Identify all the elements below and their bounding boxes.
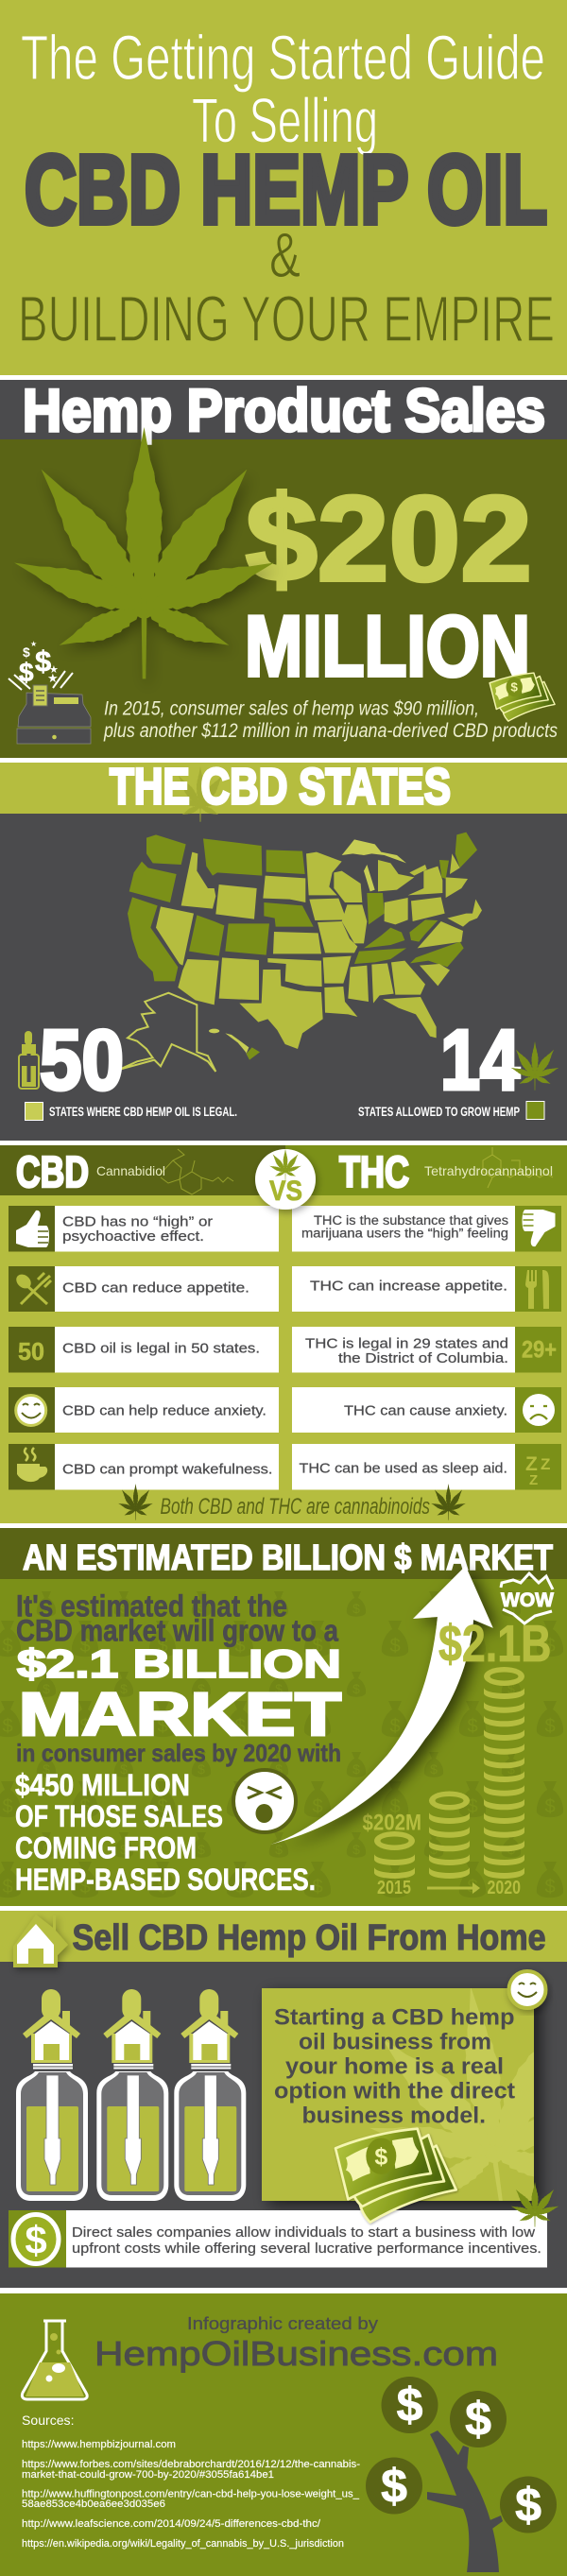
text: market estimate: in consumer sales by 2020 with	[16, 1739, 341, 1767]
text: CBD facts: psychoactive effect.	[62, 1228, 204, 1245]
icon: fork and knife	[525, 1270, 549, 1309]
icon: money stack: $	[510, 680, 519, 694]
icon: sad face	[523, 1394, 555, 1426]
icon: money tree: $	[465, 2393, 491, 2446]
badge: wow	[501, 1573, 554, 1623]
panel: title	[0, 0, 567, 375]
text: sources: http://www.leafscience.com/2014/09/24/5-differences-cbd-thc/	[22, 2518, 321, 2530]
icon: sleep z	[525, 1453, 550, 1488]
icon: oil dropper	[19, 1031, 39, 1089]
icon: money tree: $	[381, 2460, 407, 2513]
text: sources: https://en.wikipedia.org/wiki/Legality_of_cannabis_by_U.S._jurisdiction	[22, 2538, 344, 2550]
icon: cash register: $	[23, 644, 30, 660]
chart: 2015 stack	[374, 1831, 415, 1879]
label: 2020: 2020	[488, 1878, 521, 1898]
text: THC facts: THC is the substance that gives	[314, 1213, 508, 1228]
heading: THC: THC	[339, 1147, 409, 1196]
panel: hemp product sales	[0, 378, 567, 758]
text: sources: https://www.hempbizjournal.com	[22, 2439, 176, 2450]
text: VS: VS	[269, 1176, 302, 1207]
icon: footer leaf left	[117, 1484, 154, 1520]
icon: cash register: $	[35, 644, 51, 678]
legend: legal states: STATES WHERE CBD HEMP OIL IS LEGAL.	[49, 1104, 237, 1119]
text: THC facts: the District of Columbia.	[338, 1350, 508, 1366]
icon: large money stack	[335, 2129, 456, 2223]
icon: shocked face	[233, 1770, 296, 1832]
icon: dropper bottle 2	[96, 1989, 168, 2201]
text: callout copy: option with the direct	[274, 2079, 515, 2104]
icon: money stack	[490, 673, 555, 721]
logo: HempOilBusiness.com: HempOilBusiness.com	[94, 2334, 498, 2373]
icon: sleep z: Z	[529, 1472, 538, 1488]
callout: starting a business	[262, 1969, 552, 2210]
text: CBD facts: CBD can reduce appetite.	[62, 1279, 249, 1297]
icon: smile badge	[508, 1971, 546, 2008]
text: CBD facts: CBD oil is legal in 50 states.	[62, 1340, 260, 1357]
icon: cash register: ★	[49, 664, 59, 676]
number: $202: $202	[246, 472, 532, 607]
icon: dollar coin: $	[25, 2218, 47, 2262]
icon: money tree	[366, 2377, 557, 2572]
text: CBD facts: CBD has no “high” or	[62, 1213, 213, 1230]
text: THC facts: THC can be used as sleep aid.	[299, 1461, 507, 1476]
icon: number 29+: 29+	[522, 1336, 557, 1363]
icon: large money stack: $	[374, 2144, 387, 2171]
text: THC facts: marijuana users the “high” feeling	[301, 1227, 508, 1240]
panel: CBD vs THC	[0, 1145, 567, 1523]
text: sources: https://www.forbes.com/sites/debraborchardt/2016/12/12/the-cannabis-	[22, 2459, 360, 2470]
icon: leaf beside 14	[510, 1041, 559, 1091]
icon: spoon and fork	[14, 1272, 51, 1304]
text: callout copy: business model.	[302, 2104, 486, 2128]
icon: flask	[22, 2321, 87, 2399]
icon: number 50: 50	[18, 1337, 44, 1365]
text: sales detail: In 2015, consumer sales of hemp was $90 million,	[104, 697, 479, 720]
text: sources: http://www.huffingtonpost.com/entry/can-cbd-help-you-lose-weight_us_	[22, 2489, 360, 2500]
chart: CBD molecule	[159, 1149, 233, 1194]
icon: cash register: ★	[30, 640, 37, 648]
badge: versus	[255, 1149, 316, 1210]
text: both cannabinoids: Both CBD and THC are cannabinoids	[161, 1494, 430, 1520]
icon: dropper bottle 1	[16, 1989, 88, 2201]
icon: large hemp leaf	[9, 427, 279, 678]
panel: the CBD states	[0, 758, 567, 1141]
text: market estimate: $2.1 BILLION	[17, 1641, 341, 1686]
text: market estimate: COMING FROM	[15, 1831, 197, 1865]
text: market estimate: OF THOSE SALES	[15, 1799, 223, 1833]
number: 14: 14	[440, 1013, 520, 1108]
text: CBD facts: CBD can prompt wakefulness.	[62, 1461, 272, 1478]
icon: leaf in badge	[268, 1149, 302, 1180]
icon: footer leaf right	[430, 1484, 467, 1520]
heading: the CBD states: THE CBD STATES	[110, 758, 451, 815]
icon: smile	[16, 1395, 46, 1425]
text: sources	[22, 2413, 360, 2550]
number: 50: 50	[40, 1013, 124, 1108]
icon: dropper bottle 3	[174, 1989, 246, 2201]
chart: 2020 stack	[484, 1667, 524, 1879]
map: US states	[120, 833, 482, 1072]
text: market estimate: CBD market will grow to a	[16, 1614, 339, 1648]
text: market estimate: $450 MILLION	[15, 1768, 190, 1802]
text: tetrahydrocannabinol: Tetrahydrocannabinol	[424, 1163, 553, 1178]
heading: ampersand: &	[269, 220, 301, 291]
icon: coffee cup	[17, 1448, 47, 1482]
text: market estimate: MARKET	[19, 1680, 341, 1748]
text: market estimate	[15, 1589, 341, 1897]
text: THC facts: THC can cause anxiety.	[344, 1402, 507, 1419]
heading: guide line 2: To Selling	[192, 85, 378, 157]
panel: sell from home	[0, 1911, 567, 2288]
text: sources: 58ae853ce4b0ea6ee3d035e6	[22, 2499, 165, 2510]
chart: middle stack	[429, 1792, 470, 1879]
chart: THC molecule	[483, 1147, 553, 1188]
text: created by: Infographic created by	[187, 2314, 378, 2333]
badge: wow: WOW	[501, 1589, 554, 1611]
text: market estimate: HEMP-BASED SOURCES.	[15, 1863, 316, 1897]
rows: right boxes	[292, 1206, 561, 1489]
icon: small leaf behind heading	[172, 766, 229, 822]
text: CBD facts: CBD can help reduce anxiety.	[62, 1402, 266, 1419]
text: sales detail	[103, 697, 558, 742]
icon: sleep z: Z	[541, 1455, 550, 1473]
text: direct sales copy: Direct sales companies allow individuals to start a business with low	[72, 2225, 536, 2241]
text: CBD facts	[62, 1213, 272, 1478]
text: direct sales copy: upfront costs while offering several lucrative performance incentives.	[72, 2241, 541, 2257]
text: THC facts: THC is legal in 29 states and	[305, 1336, 508, 1351]
text: cannabidiol: Cannabidiol	[96, 1163, 165, 1178]
text: callout copy: your home is a real	[285, 2054, 504, 2079]
icon: cash register	[9, 640, 91, 744]
icon: sleep z: Z	[525, 1453, 538, 1475]
arrow: timeline	[427, 1882, 480, 1894]
rows: left boxes	[9, 1206, 279, 1489]
chart: coin stacks	[363, 1667, 524, 1898]
text: market estimate: It's estimated that the	[16, 1589, 287, 1623]
icon: cash register: $	[19, 658, 34, 687]
text: THC facts: THC can increase appetite.	[310, 1278, 507, 1295]
heading: CBD: CBD	[16, 1147, 89, 1196]
panel: footer	[0, 2293, 567, 2576]
arrow: growth	[270, 1566, 493, 1845]
icon: cash register: ★	[47, 671, 59, 685]
icon: thumbs down	[522, 1210, 556, 1246]
icon: money tree: $	[397, 2379, 423, 2431]
panel: billion dollar market	[0, 1528, 567, 1906]
legend: legal states	[25, 1102, 237, 1121]
text: sources: market-that-could-grow-700-by-2020/#3055fa614be1	[22, 2469, 274, 2481]
text: callout copy: oil business from	[299, 2030, 491, 2054]
icon: dollar coin	[13, 2215, 59, 2264]
text: THC facts	[299, 1213, 508, 1476]
panel: direct sales	[9, 2210, 547, 2268]
icon: leaf watermark	[370, 1988, 534, 2201]
text: callout copy	[274, 2005, 515, 2128]
icon: house	[13, 1915, 68, 1967]
icon: money tree: $	[515, 2479, 541, 2532]
icon: leaf on card corner	[510, 2182, 559, 2227]
text: direct sales copy	[72, 2225, 541, 2257]
label: 2015: 2015	[377, 1878, 411, 1898]
icon: thumbs up	[16, 1211, 49, 1247]
text: callout copy: Starting a CBD hemp	[274, 2005, 514, 2030]
label: $202M: $202M	[363, 1811, 421, 1835]
text: sources: Sources:	[22, 2413, 74, 2428]
